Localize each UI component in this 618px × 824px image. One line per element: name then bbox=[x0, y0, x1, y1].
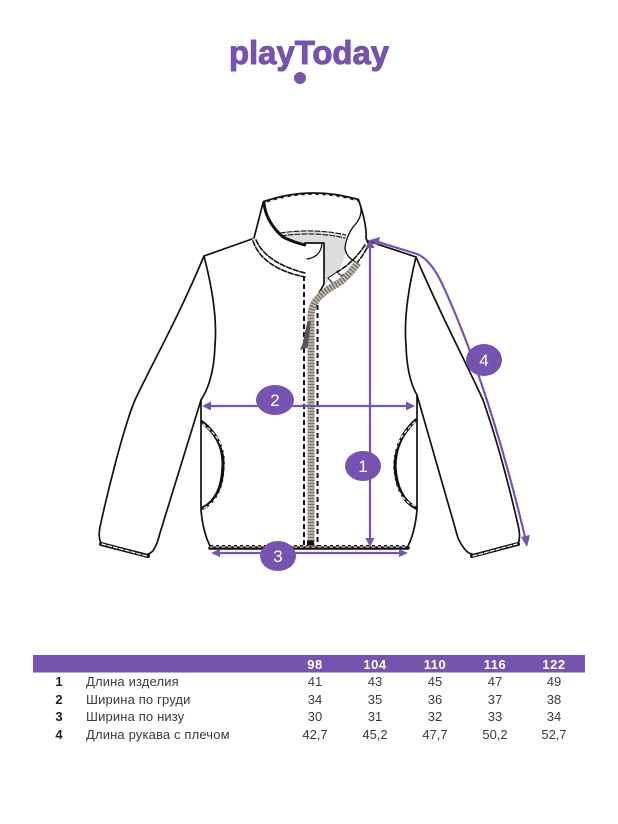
row 1: Длина изделия bbox=[86, 674, 179, 689]
row 4: 50,2 bbox=[482, 727, 508, 742]
row 4: 42,7 bbox=[302, 727, 328, 742]
row 4: 45,2 bbox=[362, 727, 388, 742]
table header: 122 bbox=[542, 657, 566, 672]
measure 1: garment length bbox=[345, 239, 381, 547]
jacket collar bbox=[253, 193, 368, 277]
row 3: 33 bbox=[488, 709, 502, 724]
zipper bbox=[301, 263, 358, 546]
row 3 bbox=[55, 709, 561, 724]
row 1 bbox=[55, 674, 561, 689]
table header: 104 bbox=[363, 657, 387, 672]
left pocket bbox=[202, 422, 225, 508]
table header bbox=[33, 655, 585, 672]
row 2: Ширина по груди bbox=[86, 692, 191, 707]
row 2: 37 bbox=[488, 692, 502, 707]
row 2: 38 bbox=[547, 692, 561, 707]
jacket technical drawing bbox=[99, 193, 519, 556]
measure 2: chest width bbox=[202, 385, 415, 415]
row 3: 30 bbox=[308, 709, 322, 724]
measure 1: garment length: 1 bbox=[358, 457, 368, 476]
measure 3: hem width: 3 bbox=[273, 547, 283, 566]
row 4: 47,7 bbox=[422, 727, 448, 742]
row 1: 45 bbox=[428, 674, 442, 689]
row 3: 32 bbox=[428, 709, 442, 724]
measure 4: sleeve length: 4 bbox=[479, 351, 489, 370]
row 1: 1 bbox=[55, 674, 63, 689]
row 4: Длина рукава с плечом bbox=[86, 727, 230, 742]
row 2 bbox=[55, 692, 561, 707]
size table bbox=[33, 655, 585, 742]
jacket right sleeve bbox=[368, 241, 520, 556]
right pocket bbox=[393, 420, 416, 508]
jacket lining bbox=[280, 231, 346, 284]
measure 2: chest width: 2 bbox=[270, 391, 280, 410]
row 2: 34 bbox=[308, 692, 322, 707]
row 3: 31 bbox=[368, 709, 382, 724]
measure 3: hem width bbox=[211, 541, 408, 571]
measure 4: sleeve length bbox=[370, 237, 530, 547]
table header: 110 bbox=[424, 657, 446, 672]
row 4 bbox=[55, 727, 567, 742]
row 1: 47 bbox=[488, 674, 502, 689]
row 2: 2 bbox=[55, 692, 63, 707]
row 4: 52,7 bbox=[541, 727, 567, 742]
row 3: Ширина по низу bbox=[86, 709, 185, 724]
jacket left sleeve bbox=[99, 239, 252, 556]
row 4: 4 bbox=[55, 727, 63, 742]
row 3: 3 bbox=[55, 709, 63, 724]
jacket body bbox=[201, 395, 417, 548]
row 1: 49 bbox=[547, 674, 561, 689]
row 1: 43 bbox=[368, 674, 382, 689]
table header: 116 bbox=[484, 657, 506, 672]
row 1: 41 bbox=[308, 674, 322, 689]
table header: 98 bbox=[307, 657, 323, 672]
jacket placket bbox=[305, 243, 345, 300]
row 3: 34 bbox=[547, 709, 561, 724]
logo: playToday: playToday bbox=[229, 34, 390, 71]
row 2: 36 bbox=[428, 692, 442, 707]
row 2: 35 bbox=[368, 692, 382, 707]
